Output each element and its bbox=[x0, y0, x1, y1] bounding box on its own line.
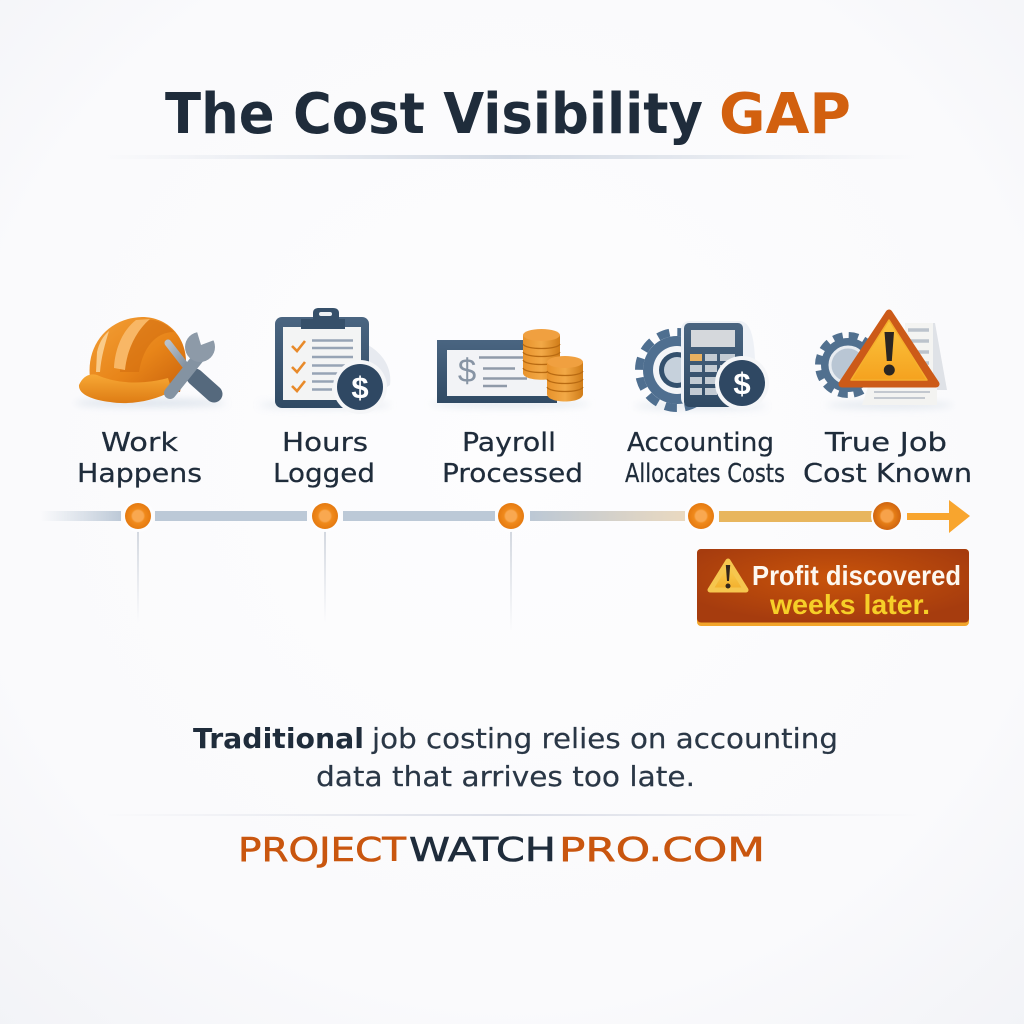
step label: Hours Logged: Logged bbox=[273, 459, 375, 489]
summary text: Traditional bbox=[193, 722, 364, 755]
step label: Work Happens bbox=[77, 428, 202, 489]
step label: True Job Cost Known bbox=[803, 428, 972, 489]
icon: hard hat and tools bbox=[74, 317, 226, 406]
step label: Payroll Processed bbox=[442, 428, 583, 489]
footer divider bbox=[100, 814, 924, 816]
title underline bbox=[100, 155, 920, 159]
footer url: PROJECT bbox=[238, 830, 407, 869]
step label: Accounting Allocates Costs: Allocates Costs bbox=[625, 459, 785, 489]
icon: small warning triangle bbox=[710, 561, 746, 590]
icon: warning triangle with gear and report bbox=[818, 313, 954, 408]
step label: True Job Cost Known: Cost Known bbox=[803, 459, 972, 489]
callout: profit discovered weeks later: Profit discovered bbox=[752, 560, 961, 591]
summary text: job costing relies on accounting bbox=[371, 722, 838, 755]
step label: Accounting Allocates Costs bbox=[625, 428, 785, 489]
footer url bbox=[238, 830, 765, 869]
step label: Accounting Allocates Costs: Accounting bbox=[627, 428, 774, 458]
icon: gear, calculator and dollar coin: $ bbox=[733, 366, 751, 401]
footer url: WATCH bbox=[409, 830, 556, 869]
step label: Hours Logged bbox=[273, 428, 375, 489]
step label: Payroll Processed: Processed bbox=[442, 459, 583, 489]
summary text: data that arrives too late. bbox=[316, 760, 695, 793]
title: The Cost Visibility bbox=[165, 82, 703, 147]
step label: Payroll Processed: Payroll bbox=[462, 428, 556, 458]
step label: Work Happens: Work bbox=[101, 428, 178, 458]
icon: clipboard with dollar coin: $ bbox=[351, 370, 369, 405]
timeline bbox=[40, 500, 970, 632]
footer url: PRO.COM bbox=[559, 830, 765, 869]
step label: True Job Cost Known: True Job bbox=[824, 428, 947, 458]
icon: paycheck with coin stacks bbox=[430, 329, 590, 407]
timeline arrow bbox=[907, 500, 970, 533]
icon: clipboard with dollar coin bbox=[259, 308, 391, 414]
title: GAP bbox=[719, 82, 851, 147]
step label: Hours Logged: Hours bbox=[282, 428, 368, 458]
callout: profit discovered weeks later: weeks later. bbox=[769, 589, 930, 620]
icon: paycheck with coin stacks: $ bbox=[458, 352, 476, 389]
step label: Work Happens: Happens bbox=[77, 459, 202, 489]
summary text bbox=[193, 722, 838, 793]
icon: gear, calculator and dollar coin bbox=[634, 321, 769, 410]
callout: profit discovered weeks later bbox=[697, 549, 969, 626]
